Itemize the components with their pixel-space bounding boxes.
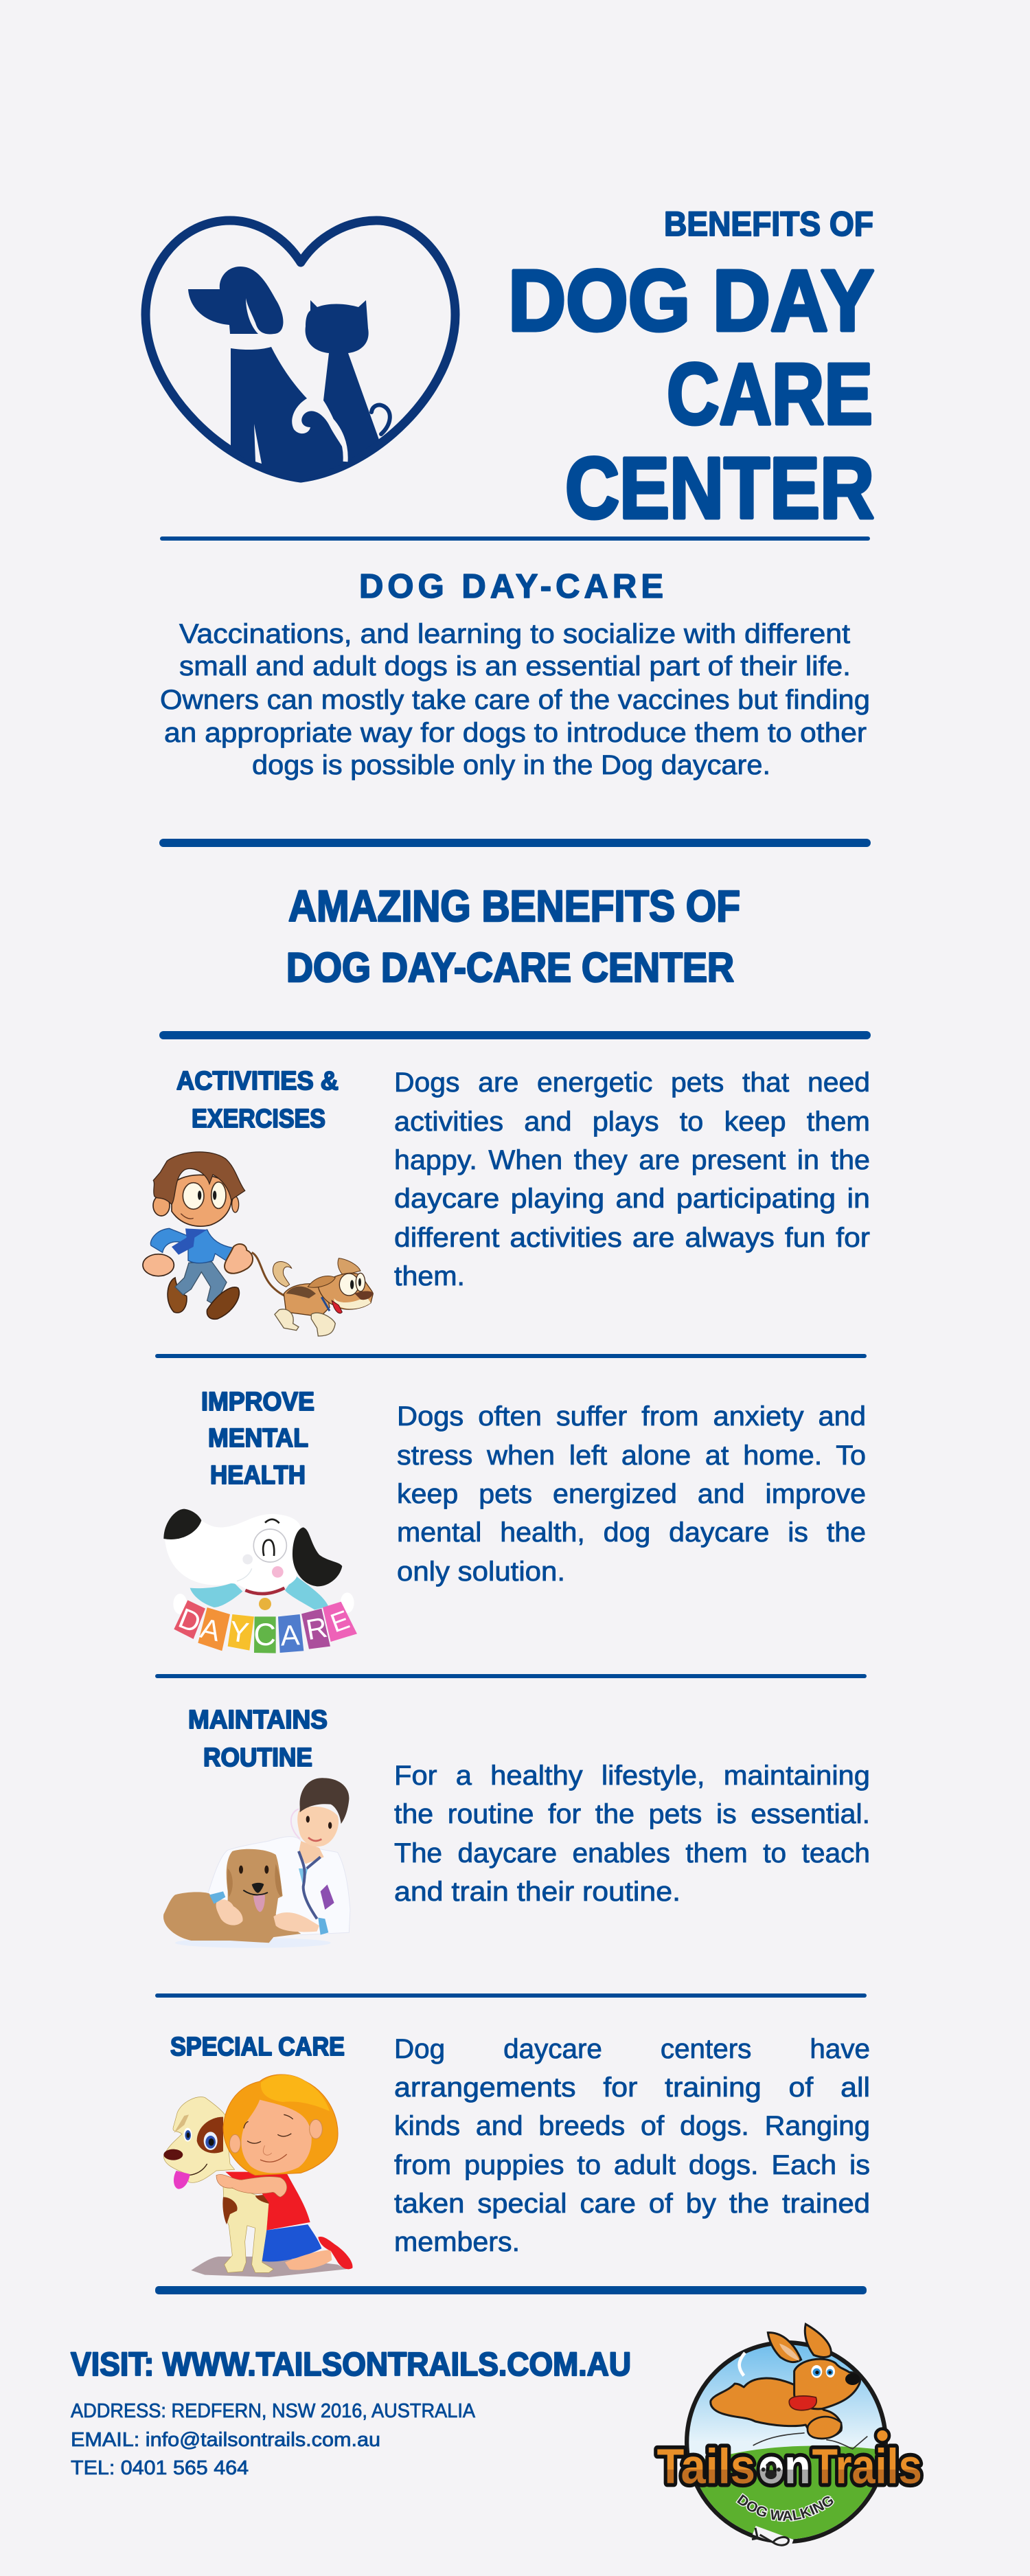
title: CENTER <box>565 440 874 536</box>
panel text: them. <box>394 1261 465 1291</box>
panel text <box>394 1761 870 1907</box>
panel text: from puppies to adult dogs. Each is <box>394 2150 870 2180</box>
section heading <box>286 881 740 991</box>
icon: dalmatian with daycare banner: E <box>327 1605 354 1638</box>
contact details <box>71 2400 476 2479</box>
intro paragraph: Vaccinations, and learning to socialize with different <box>179 619 850 649</box>
panel text: Dogs often suffer from anxiety and <box>397 1401 866 1432</box>
logo: Tails on Trails <box>654 2323 924 2546</box>
panel heading: MENTAL <box>208 1424 308 1453</box>
title: DOG DAY <box>508 252 874 349</box>
panel heading: SPECIAL CARE <box>170 2033 345 2061</box>
icon: dalmatian with daycare banner: D <box>174 1601 205 1639</box>
panel: maintains routine <box>163 1706 870 1948</box>
icon: heart with dog and cat <box>146 221 455 482</box>
panel heading: MAINTAINS <box>188 1706 328 1735</box>
panel text: stress when left alone at home. To <box>397 1440 866 1471</box>
intro paragraph: dogs is possible only in the Dog daycare. <box>252 750 770 780</box>
panel text <box>394 2034 870 2257</box>
logo: Tails on Trails: Tails <box>657 2439 755 2494</box>
panel: special care <box>163 2033 870 2277</box>
panel text: mental health, dog daycare is the <box>397 1517 866 1548</box>
panel text: happy. When they are present in the <box>394 1145 870 1175</box>
intro paragraph: Owners can mostly take care of the vaccines but finding <box>160 685 870 715</box>
panel: improve mental health <box>163 1388 866 1653</box>
panel text: members. <box>394 2227 520 2257</box>
logo: Tails on Trails: Trails <box>812 2439 922 2494</box>
contact details: ADDRESS: REDFERN, NSW 2016, AUSTRALIA <box>71 2400 476 2422</box>
panel text: Dog daycare centers have <box>394 2034 870 2064</box>
intro paragraph <box>160 619 870 780</box>
icon: dalmatian with daycare banner <box>163 1509 357 1653</box>
icon: dalmatian with daycare banner: R <box>304 1611 330 1646</box>
intro paragraph: an appropriate way for dogs to introduce them to other <box>164 718 867 748</box>
intro heading: DOG DAY-CARE <box>359 568 663 605</box>
icon: vet with golden dog <box>163 1778 350 1948</box>
panel text: Dogs are energetic pets that need <box>394 1067 870 1098</box>
intro section <box>160 568 870 780</box>
contact details: EMAIL: info@tailsontrails.com.au <box>71 2429 380 2451</box>
title: CARE <box>667 346 873 442</box>
section heading: DOG DAY-CARE CENTER <box>286 945 734 991</box>
panel heading: IMPROVE <box>201 1388 314 1416</box>
panel text: keep pets energized and improve <box>397 1479 866 1509</box>
panel text: arrangements for training of all <box>394 2072 870 2103</box>
infographic page <box>70 211 924 2546</box>
panel heading <box>176 1067 339 1133</box>
section heading: AMAZING BENEFITS OF <box>288 881 740 931</box>
panel: activities and exercises <box>143 1067 870 1336</box>
panel text: For a healthy lifestyle, maintaining <box>394 1761 870 1791</box>
panel text: daycare playing and participating in <box>394 1184 870 1214</box>
panel heading: HEALTH <box>210 1461 306 1490</box>
intro paragraph: small and adult dogs is an essential part of their life. <box>179 651 851 681</box>
panel heading: ACTIVITIES & <box>176 1067 339 1096</box>
panel heading: ROUTINE <box>203 1743 312 1772</box>
icon: dalmatian with daycare banner: C <box>253 1617 276 1652</box>
panel text: taken special care of by the trained <box>394 2189 870 2219</box>
logo: Tails on Trails: DOG WALKING <box>735 2493 835 2522</box>
icon: dalmatian with daycare banner: A <box>198 1612 224 1647</box>
icon: girl hugging dog <box>163 2075 352 2277</box>
panel heading <box>201 1388 314 1490</box>
panel heading: EXERCISES <box>192 1105 325 1133</box>
panel text <box>394 1067 870 1291</box>
panel text <box>397 1401 866 1587</box>
icon: boy walking dog on leash <box>143 1152 373 1336</box>
title <box>508 205 874 536</box>
panel text: different activities are always fun for <box>394 1223 870 1253</box>
website heading: VISIT: WWW.TAILSONTRAILS.COM.AU <box>71 2347 631 2383</box>
panel text: kinds and breeds of dogs. Ranging <box>394 2111 870 2141</box>
panel text: and train their routine. <box>394 1877 680 1907</box>
icon: dalmatian with daycare banner: Y <box>227 1614 251 1649</box>
panel text: the routine for the pets is essential. <box>394 1799 870 1829</box>
panel text: activities and plays to keep them <box>394 1107 870 1137</box>
title: BENEFITS OF <box>664 205 873 243</box>
panel text: The daycare enables them to teach <box>394 1838 870 1868</box>
panel text: only solution. <box>397 1557 565 1587</box>
panel heading <box>188 1706 328 1772</box>
header <box>146 205 874 536</box>
contact details: TEL: 0401 565 464 <box>71 2457 249 2479</box>
icon: dalmatian with daycare banner: A <box>279 1618 301 1652</box>
footer <box>70 2323 924 2546</box>
logo: Tails on Trails: on <box>758 2439 811 2494</box>
